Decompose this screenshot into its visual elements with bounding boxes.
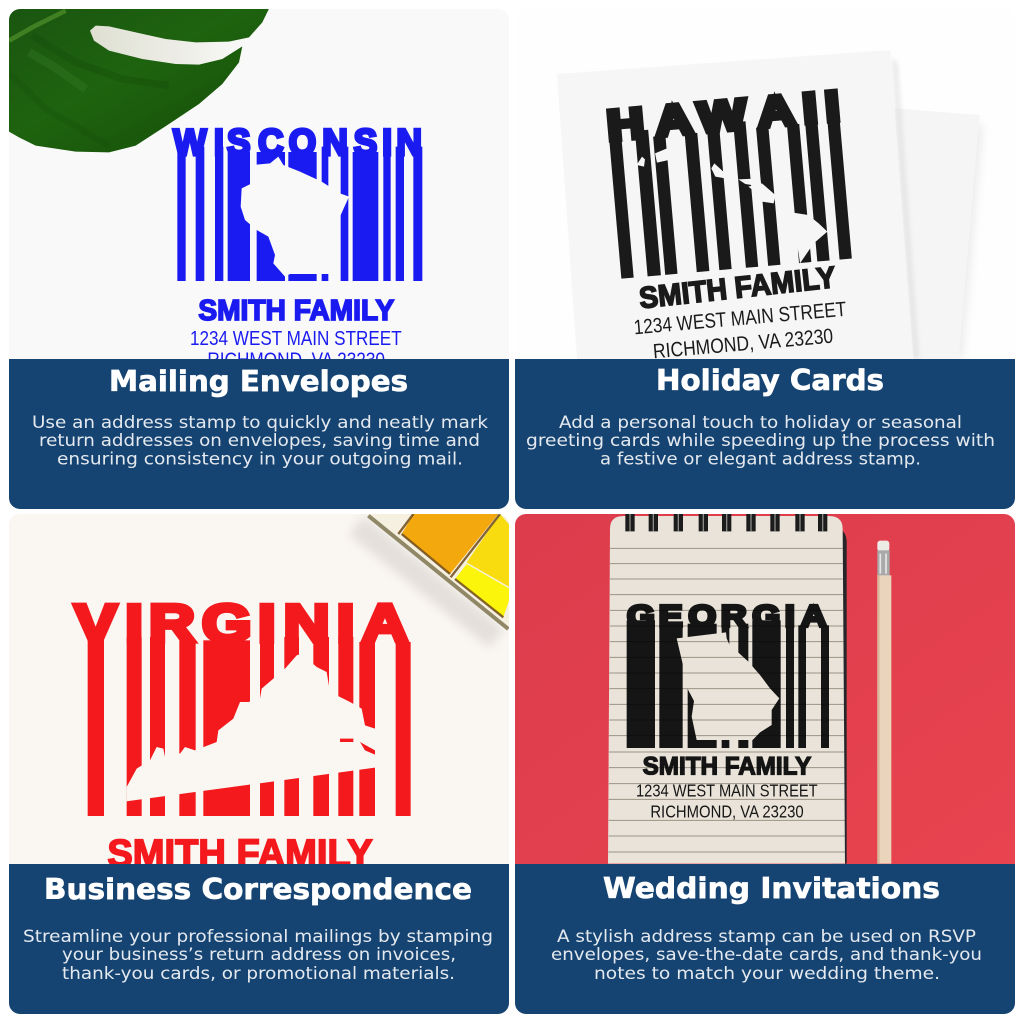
photo background	[515, 9, 1015, 359]
stamp text: street: 1234 WEST MAIN STREET	[190, 327, 402, 350]
state silhouette	[677, 632, 779, 740]
description	[551, 927, 982, 984]
description: Add a personal touch to holiday or seasonal	[559, 413, 962, 433]
panel: business correspondence	[9, 512, 510, 1014]
description: ensuring consistency in your outgoing mail.	[57, 450, 463, 470]
description: A stylish address stamp can be used on RSVP	[557, 927, 976, 947]
barcode bars	[610, 121, 852, 279]
stamp text: street: 1234 WEST MAIN STREET	[633, 298, 848, 339]
icon: paint palette corner	[357, 512, 510, 639]
caption band	[515, 864, 1015, 1014]
stamp: Virginia	[74, 594, 411, 875]
stamp text: street: 1234 WEST MAIN STREET	[636, 780, 818, 800]
description	[23, 927, 493, 984]
caption band	[9, 864, 509, 1014]
stamp: Georgia	[627, 600, 829, 822]
caption band	[9, 359, 509, 509]
barcode bars	[88, 637, 411, 816]
bay details	[340, 739, 375, 755]
heading: Business Correspondence	[44, 873, 472, 906]
description: a festive or elegant address stamp.	[600, 450, 921, 470]
icon: monstera leaf	[7, 7, 270, 152]
description: Use an address stamp to quickly and neatly mark	[32, 413, 488, 433]
heading: Mailing Envelopes	[109, 365, 408, 398]
description: your business’s return address on invoices,	[62, 945, 456, 965]
panel: wedding invitations	[515, 514, 1015, 1014]
description: return addresses on envelopes, saving time and	[39, 431, 480, 451]
stamp: Hawaii	[605, 82, 853, 363]
paper cards	[892, 60, 983, 359]
stamp text: family name: SMITH FAMILY	[643, 754, 812, 781]
notebook back cover	[832, 525, 847, 864]
description: envelopes, save-the-date cards, and thank-you	[551, 945, 982, 965]
notebook and pencil	[608, 514, 891, 864]
caption band	[515, 359, 1015, 509]
description	[32, 413, 488, 470]
stamp text: family name: SMITH FAMILY	[638, 261, 837, 315]
stamp text: family name: SMITH FAMILY	[107, 832, 373, 875]
stamp text: city: RICHMOND, VA 23230	[650, 802, 804, 822]
state name: GEORGIA	[627, 600, 827, 634]
photo background	[9, 514, 509, 864]
description: thank-you cards, or promotional materials.	[62, 964, 455, 984]
state silhouette	[241, 157, 349, 277]
state name: WISCONSIN	[173, 121, 422, 163]
panel: mailing envelopes	[7, 7, 509, 509]
stamp text: city: RICHMOND, VA 23230	[207, 349, 385, 372]
notebook page	[608, 516, 845, 864]
description: Streamline your professional mailings by stamping	[23, 927, 493, 947]
spiral rings	[630, 514, 823, 531]
stamp text: city: RICHMOND, VA 23230	[652, 325, 834, 363]
icon: pencil	[877, 541, 891, 864]
panel: holiday cards	[515, 9, 1015, 509]
photo background: white envelope	[9, 9, 509, 359]
stamp: Wisconsin	[173, 121, 422, 372]
state name: HAWAII	[605, 82, 841, 149]
barcode bars	[627, 620, 829, 748]
state silhouette: islands	[637, 148, 827, 263]
description	[526, 413, 995, 470]
photo background: red paper	[515, 514, 1015, 864]
state name: VIRGINIA	[74, 594, 408, 653]
stamp text: family name: SMITH FAMILY	[198, 295, 394, 327]
description: notes to match your wedding theme.	[594, 964, 940, 984]
state silhouette	[127, 654, 375, 801]
barcode bars	[177, 147, 422, 281]
description: greeting cards while speeding up the process with	[526, 431, 995, 451]
barcode group	[605, 82, 853, 279]
heading: Holiday Cards	[656, 364, 884, 397]
heading: Wedding Invitations	[603, 872, 940, 905]
